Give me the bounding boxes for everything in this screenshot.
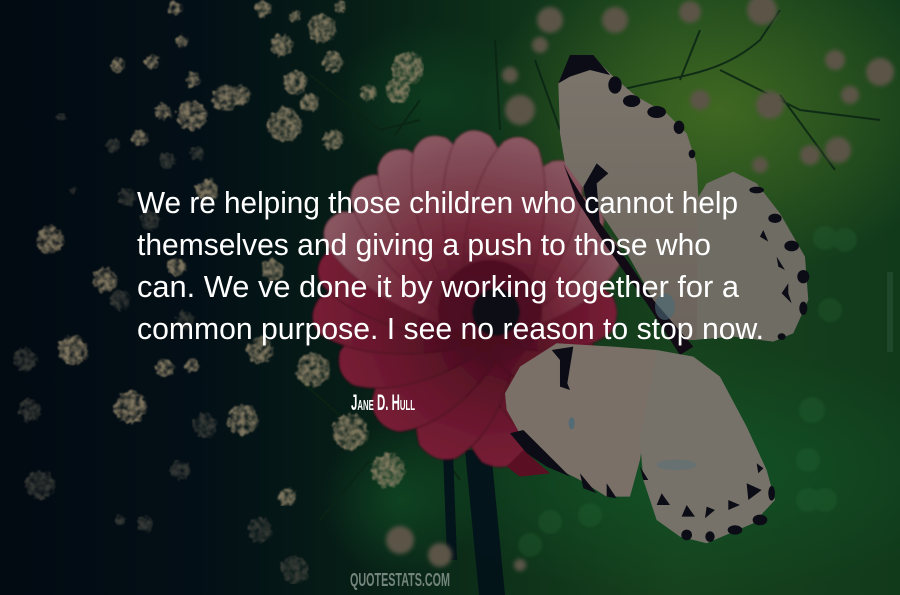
blossoms: dim cluster	[13, 113, 309, 584]
flower centre	[438, 260, 542, 364]
butterfly	[505, 55, 809, 543]
blossoms: muted cluster top right	[386, 0, 894, 571]
quote line 4: common purpose. I see no reason to stop now.	[137, 311, 764, 346]
lower-left wing red shadow	[507, 450, 550, 477]
flower	[308, 124, 634, 472]
bokeh lights	[518, 226, 857, 557]
quote text	[137, 185, 764, 346]
author: Jane D. Hull	[351, 390, 415, 415]
quote line 1: We re helping those children who cannot help	[137, 185, 738, 220]
left hindwing	[505, 343, 657, 497]
site credit: QUOTESTATS.COM	[350, 570, 450, 590]
lower petals	[309, 228, 623, 472]
right forewing	[667, 172, 808, 342]
flower stem	[443, 450, 505, 595]
branches	[300, 10, 880, 520]
upper petals	[308, 124, 634, 345]
quote line 3: can. We ve done it by working together for a	[137, 269, 740, 304]
wing markings	[510, 55, 809, 542]
body shadow edge	[563, 163, 693, 355]
quote line 2: themselves and giving a push to those who	[137, 227, 711, 262]
body glow	[655, 293, 675, 320]
upper forewing	[558, 57, 698, 340]
right hindwing	[640, 350, 775, 543]
watermark: side	[887, 272, 893, 352]
blossoms: bright cluster	[36, 0, 424, 506]
